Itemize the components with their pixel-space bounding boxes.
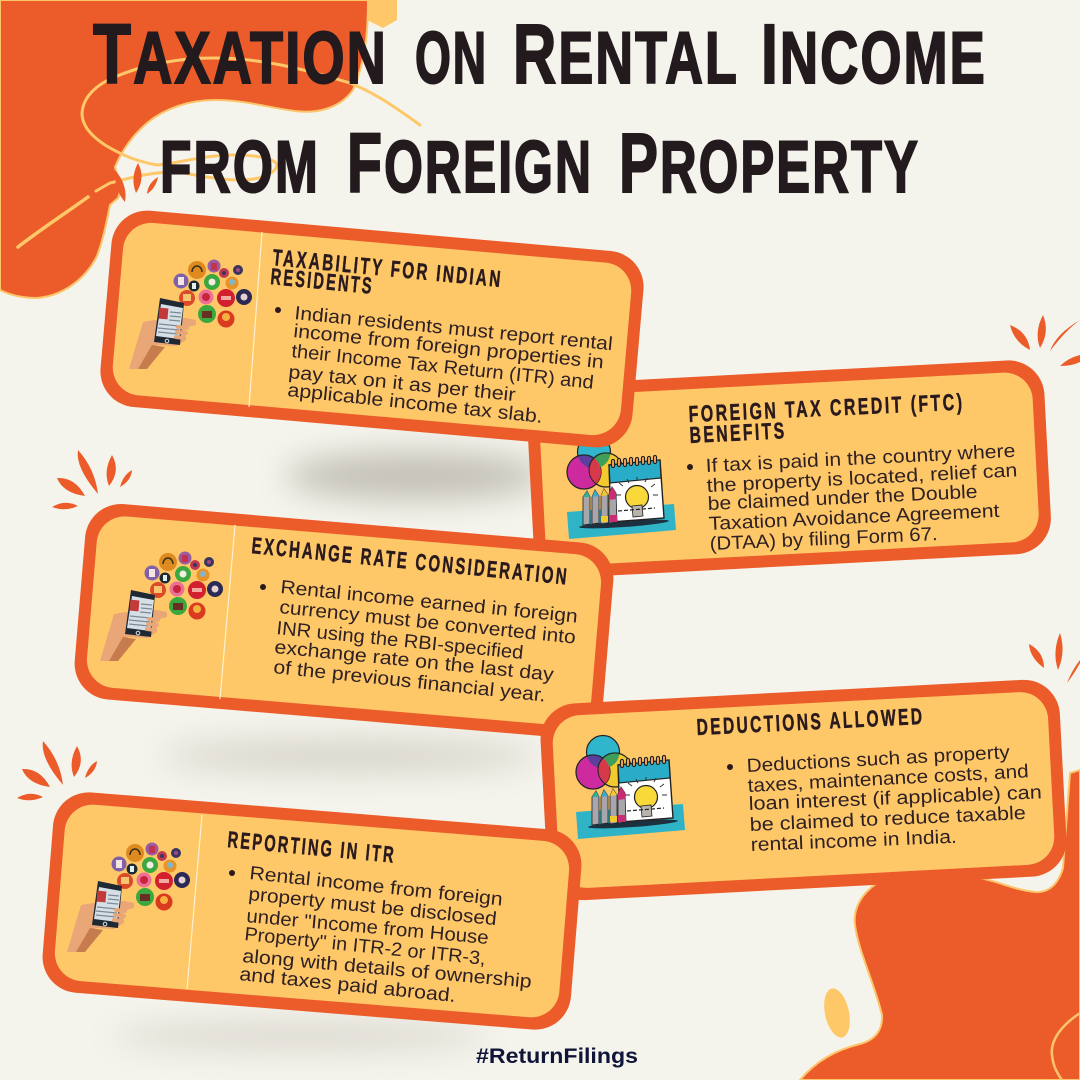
panel: reporting in ITR xyxy=(40,790,584,1032)
heading: foreign tax credit xyxy=(688,389,965,448)
footer hashtag: #ReturnFilings xyxy=(476,1045,638,1068)
title: FOREIGN xyxy=(347,116,593,210)
text block: exchange rate xyxy=(260,577,579,707)
decorative burst: left middle xyxy=(52,450,132,509)
text block: reporting: property must be disclosed xyxy=(247,884,498,930)
text block: taxability: applicable income tax slab. xyxy=(286,380,544,428)
panel: taxability for Indian residents xyxy=(97,208,647,450)
decorative blob: bottom right xyxy=(800,770,1080,1080)
text block: foreign tax credit: If tax is paid in the country where xyxy=(705,441,1016,477)
title: RENTAL xyxy=(513,7,739,101)
text block: exchange rate: Rental income earned in foreign xyxy=(280,577,579,628)
text block: taxability xyxy=(275,303,614,428)
text block: deductions: loan interest (if applicable) can xyxy=(748,782,1042,815)
heading: reporting: REPORTING IN ITR xyxy=(227,826,397,868)
text block: foreign tax credit: the property is located, relief can xyxy=(706,460,1018,497)
icon: phone with app bubbles xyxy=(100,552,223,661)
shadow: below third card xyxy=(160,740,540,772)
title: INCOME xyxy=(761,7,987,101)
decorative burst: middle right xyxy=(1029,633,1080,683)
text block: deductions: rental income in India. xyxy=(750,827,957,856)
icon: phone with app bubbles xyxy=(67,842,190,952)
heading: taxability: TAXABILITY FOR INDIAN xyxy=(272,244,504,292)
decorative burst: title xyxy=(115,163,158,202)
heading: taxability: RESIDENTS xyxy=(270,263,375,299)
text block: foreign tax credit: (DTAA) by filing Form 67. xyxy=(709,524,938,555)
icon: crayons and calendar xyxy=(567,436,676,539)
text block: exchange rate: of the previous financial year. xyxy=(272,657,547,707)
heading: foreign tax credit: FOREIGN TAX CREDIT (FTC) xyxy=(688,389,965,427)
text block: reporting: Rental income from foreign xyxy=(248,863,504,911)
panel: exchange rate consideration xyxy=(72,501,616,741)
decorative burst: left lower xyxy=(17,741,97,800)
icon: phone with app bubbles xyxy=(129,260,252,369)
text block: taxability: their Income Tax Return (ITR) and xyxy=(290,341,595,394)
text block: foreign tax credit: be claimed under the Double xyxy=(707,482,978,515)
text block: reporting: along with details of ownership xyxy=(242,946,532,993)
panel: deductions allowed xyxy=(539,678,1068,902)
text block: reporting: under "Income from House xyxy=(246,906,489,949)
text block: reporting xyxy=(229,863,532,1007)
text block: reporting: and taxes paid abroad. xyxy=(238,964,457,1007)
title: ON xyxy=(415,18,488,99)
text block: deductions xyxy=(727,742,1042,856)
decorative blob: top left xyxy=(0,0,420,298)
text block: deductions: be claimed to reduce taxable xyxy=(749,803,1026,836)
text block: deductions: Deductions such as property xyxy=(746,742,1011,777)
icon: crayons and calendar xyxy=(576,736,685,839)
text block: taxability: pay tax on it as per their xyxy=(287,362,517,406)
text block: taxability: Indian residents must report rental xyxy=(294,303,614,355)
heading: foreign tax credit: BENEFITS xyxy=(689,417,787,448)
heading: exchange rate: EXCHANGE RATE CONSIDERATION xyxy=(251,532,570,590)
text block: foreign tax credit: Taxation Avoidance Agreement xyxy=(708,501,1001,535)
panel: foreign tax credit benefits xyxy=(525,359,1053,579)
title: PROPERTY xyxy=(619,116,920,210)
shadow: below first card xyxy=(285,452,545,500)
text block: exchange rate: currency must be converted into xyxy=(278,597,577,649)
text block: foreign tax credit xyxy=(687,441,1018,555)
title: TAXATION xyxy=(93,7,388,101)
text block: reporting: Property" in ITR-2 or ITR-3, xyxy=(243,924,487,970)
heading: deductions: DEDUCTIONS ALLOWED xyxy=(696,703,925,740)
title: FROM xyxy=(160,127,320,208)
text block: deductions: taxes, maintenance costs, and xyxy=(747,761,1029,797)
text block: exchange rate: exchange rate on the last day xyxy=(274,637,555,686)
decorative burst: top right xyxy=(1010,315,1080,366)
heading: taxability xyxy=(270,244,504,299)
text block: exchange rate: INR using the RBI-specified xyxy=(275,618,524,664)
text block: taxability: income from foreign properties in xyxy=(292,321,605,373)
title xyxy=(93,7,987,210)
shadow: below fifth card xyxy=(110,1024,490,1048)
